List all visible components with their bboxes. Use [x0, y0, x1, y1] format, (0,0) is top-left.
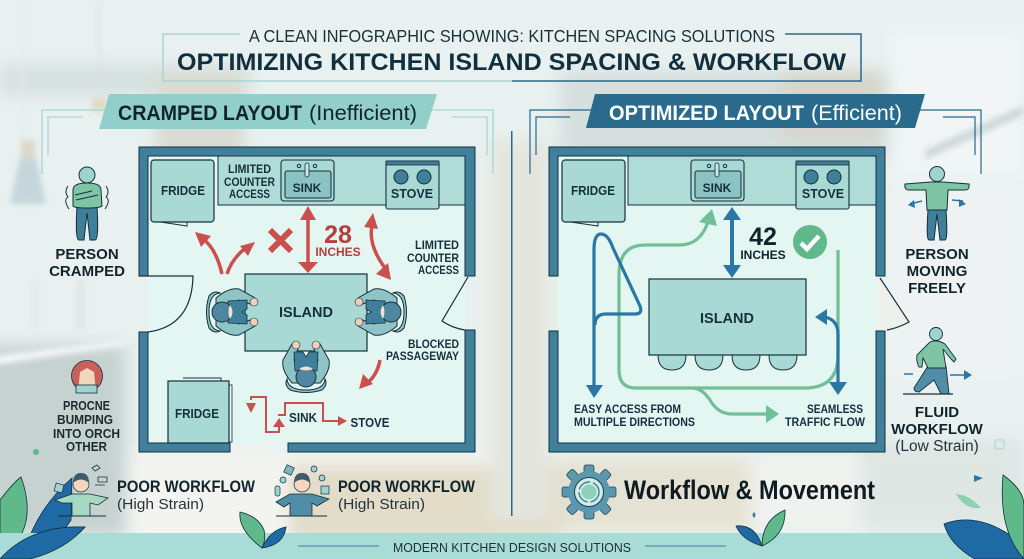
label: person moving freely: PERSON — [905, 246, 969, 263]
label: limited counter access top — [224, 162, 275, 201]
label: bumping into each other: INTO ORCH — [53, 426, 120, 441]
banner: optimized layout: (Efficient) — [811, 102, 902, 125]
fridge bottom — [168, 378, 232, 443]
label: limited counter access right: ACCESS — [418, 263, 459, 277]
icon: walking person — [903, 328, 972, 394]
counter — [218, 156, 465, 205]
blue double arrow right — [815, 309, 847, 395]
floor plan: cramped — [139, 147, 475, 452]
measurement: 42 inches — [740, 223, 786, 262]
stove: STOVE — [802, 187, 844, 201]
footer band — [0, 533, 1024, 559]
title block — [163, 26, 861, 81]
text: poor workflow 2: (High Strain) — [338, 497, 425, 513]
stove: STOVE — [391, 187, 433, 201]
decor: leaves center left — [240, 512, 286, 548]
label: bumping into each other: OTHER — [66, 439, 108, 454]
frame lines: cramped — [42, 110, 493, 174]
label: limited counter access top: COUNTER — [224, 175, 275, 189]
measurement: 28 inches: INCHES — [315, 245, 361, 259]
decor: leaves left — [0, 449, 116, 559]
label: bumping into each other: BUMPING — [57, 412, 113, 427]
icon: poor workflow person left — [54, 465, 108, 516]
label: person cramped: PERSON — [55, 246, 119, 263]
measurement: 28 inches: 28 — [324, 221, 352, 249]
label: seamless traffic flow: TRAFFIC FLOW — [785, 417, 865, 429]
fridge — [562, 160, 625, 226]
label: limited counter access right — [407, 238, 459, 277]
sink: SINK — [293, 181, 322, 195]
workflow path sink to stove: STOVE — [350, 415, 390, 430]
counter — [628, 156, 876, 205]
label: easy access — [574, 404, 695, 429]
label: limited counter access right: COUNTER — [407, 251, 459, 265]
stools — [658, 355, 797, 370]
icon: bumping — [72, 360, 102, 393]
label: fluid workflow: (Low Strain) — [895, 438, 979, 455]
banner: optimized layout — [586, 94, 925, 128]
door — [876, 276, 909, 330]
island: ISLAND — [279, 305, 333, 321]
fridge top — [151, 160, 214, 226]
people around island — [206, 289, 406, 392]
workflow path sink to stove: SINK — [289, 410, 318, 425]
label: seamless traffic flow — [785, 404, 865, 429]
sink: SINK — [703, 181, 732, 195]
label: easy access: MULTIPLE DIRECTIONS — [574, 417, 695, 429]
text: poor workflow 2 — [338, 478, 475, 513]
blue access path — [586, 234, 641, 398]
label: bumping into each other: PROCNE — [63, 398, 110, 413]
floor plan: optimized — [549, 147, 909, 452]
label: blocked passageway: PASSAGEWAY — [386, 349, 459, 363]
label: person cramped — [49, 246, 125, 280]
green traffic path — [619, 209, 838, 423]
main title: OPTIMIZING KITCHEN ISLAND SPACING & WORKFLOW — [177, 49, 847, 76]
label: seamless traffic flow: SEAMLESS — [807, 404, 863, 416]
fridge top: FRIDGE — [161, 184, 205, 198]
measurement: 42 inches: INCHES — [740, 248, 786, 262]
walls — [549, 147, 885, 276]
doors — [139, 276, 193, 332]
measurement: 28 inches — [315, 221, 361, 259]
label: fluid workflow: FLUID — [915, 404, 959, 421]
stove — [796, 161, 849, 209]
center divider — [511, 131, 512, 516]
stove — [386, 161, 439, 209]
footer band: MODERN KITCHEN DESIGN SOLUTIONS — [393, 540, 631, 555]
walls — [139, 147, 475, 276]
label: limited counter access top: LIMITED — [228, 162, 271, 176]
icon: person cramped — [66, 167, 108, 240]
label: blocked passageway — [386, 337, 459, 363]
text: poor workflow 1 — [117, 478, 255, 513]
frame lines: optimized — [530, 110, 981, 174]
panel: cramped layout — [42, 94, 493, 452]
small square — [995, 440, 1004, 449]
fridge: FRIDGE — [571, 184, 615, 198]
decor: leaves right — [944, 475, 1024, 559]
workflow path sink to stove — [246, 397, 390, 432]
icon: gear — [562, 465, 616, 519]
island: ISLAND — [700, 311, 754, 327]
label: bumping into each other — [53, 398, 120, 454]
banner: cramped layout — [99, 94, 437, 129]
label: blocked passageway: BLOCKED — [408, 337, 459, 351]
banner: cramped layout: (Inefficient) — [309, 102, 417, 125]
text: poor workflow 2: POOR WORKFLOW — [338, 478, 475, 496]
decor: leaves center right — [736, 510, 785, 546]
sink — [281, 160, 334, 201]
red arrows — [202, 218, 385, 384]
label: easy access: EASY ACCESS FROM — [574, 404, 681, 416]
label: person moving freely — [905, 246, 969, 297]
fridge bottom: FRIDGE — [175, 406, 219, 421]
label: person moving freely: FREELY — [908, 280, 966, 297]
check mark badge — [793, 225, 827, 259]
icon: poor workflow person right — [275, 465, 329, 516]
icon: person moving freely — [905, 166, 969, 240]
measurement: 42 inches: 42 — [749, 223, 777, 251]
label: fluid workflow — [891, 404, 984, 455]
subtitle: A CLEAN INFOGRAPHIC SHOWING: KITCHEN SPACING SOLUTIONS — [249, 26, 775, 46]
label: person cramped: CRAMPED — [49, 263, 125, 280]
island — [245, 274, 367, 351]
sink — [691, 160, 744, 201]
banner: cramped layout: CRAMPED LAYOUT — [118, 102, 302, 125]
blue clearance arrow — [723, 207, 741, 278]
label: limited counter access top: ACCESS — [229, 187, 270, 201]
red x — [270, 230, 291, 251]
label: fluid workflow: WORKFLOW — [891, 421, 984, 438]
banner: optimized layout: OPTIMIZED LAYOUT — [609, 102, 804, 125]
label: person moving freely: MOVING — [907, 263, 967, 280]
decor: leaves left foreground — [0, 527, 85, 559]
text: poor workflow 1: POOR WORKFLOW — [117, 478, 255, 496]
label: limited counter access right: LIMITED — [415, 238, 459, 252]
text: poor workflow 1: (High Strain) — [117, 497, 204, 513]
panel: optimized layout — [530, 94, 981, 452]
label: workflow and movement: Workflow & Movement — [624, 475, 875, 505]
island — [649, 279, 806, 355]
